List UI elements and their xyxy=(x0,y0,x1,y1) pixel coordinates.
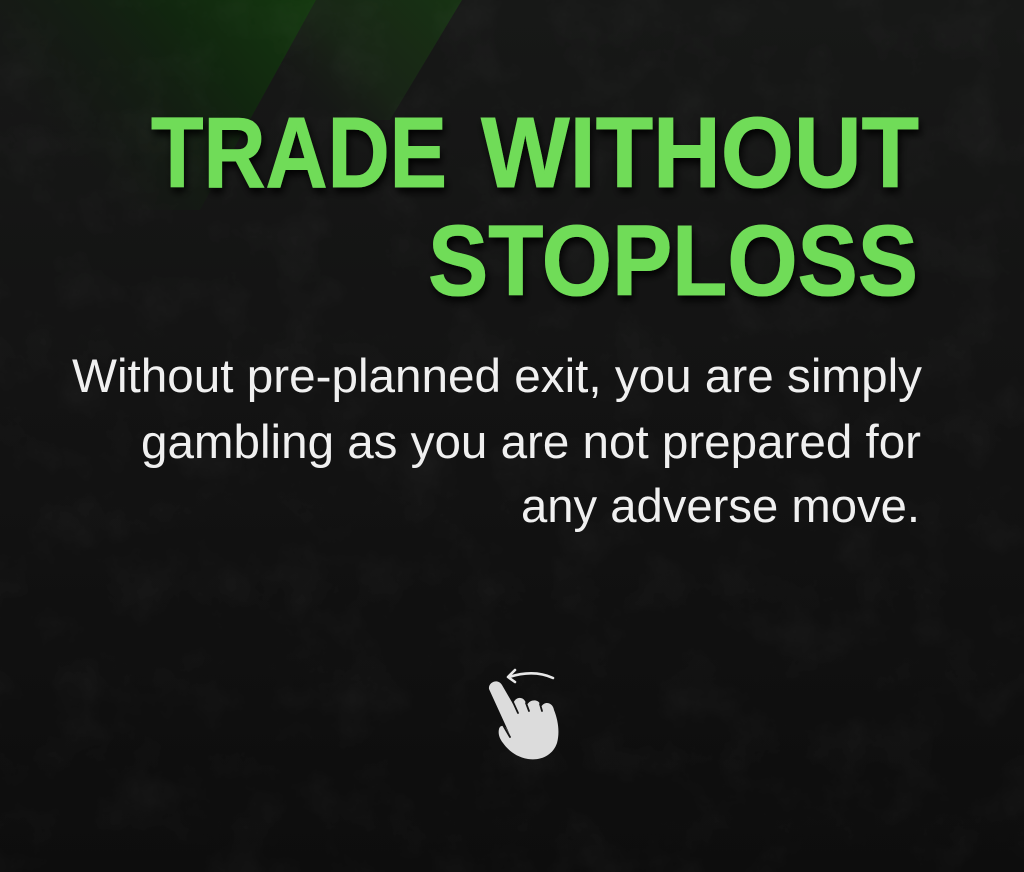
body line 3: any adverse move. xyxy=(521,480,920,533)
title line 1: TRADE xyxy=(151,97,447,209)
icon: hand xyxy=(489,681,558,759)
body text xyxy=(72,350,922,533)
title line 1: WITHOUT xyxy=(481,97,919,209)
body line 2: gambling as you are not prepared for xyxy=(141,416,921,469)
body line 1: Without pre-planned exit, you are simply xyxy=(72,350,922,403)
icon: swipe arrow xyxy=(508,670,553,682)
title line 2: STOPLOSS xyxy=(428,205,918,317)
hand finger separators xyxy=(503,702,542,737)
icon: swipe left hand xyxy=(489,670,558,759)
title xyxy=(151,97,919,317)
title line 1 xyxy=(151,97,919,209)
